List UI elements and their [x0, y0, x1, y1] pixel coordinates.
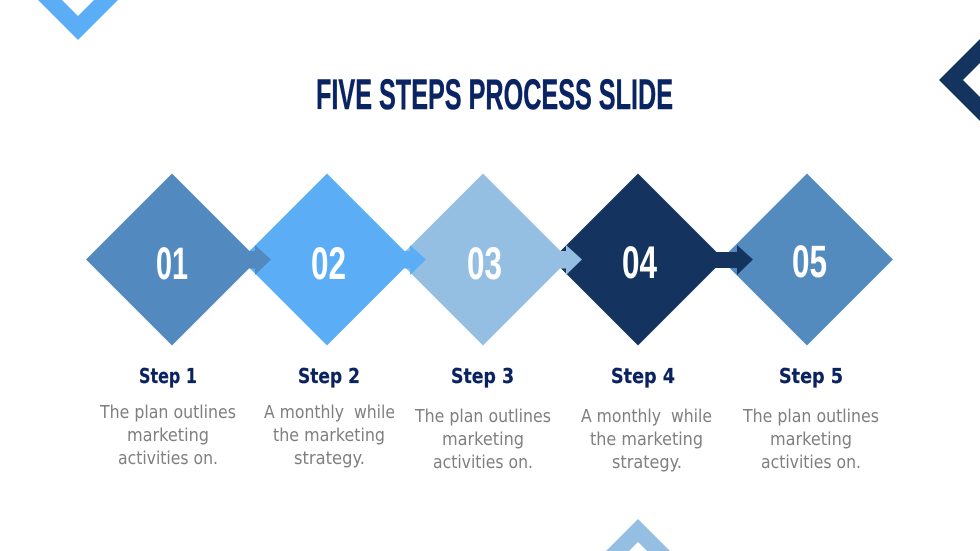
text block: step 3 description: activities on. — [433, 452, 533, 473]
number 01: 01 — [156, 238, 188, 289]
diamond 5 — [721, 174, 893, 346]
text block: step 5 description: marketing — [770, 429, 852, 450]
text block: step 2 description: the marketing — [273, 425, 385, 446]
text block: step 2 description: A monthly while — [264, 402, 395, 423]
diamond 1 — [86, 174, 258, 346]
number 02: 02 — [311, 238, 346, 289]
arrow: step 1 to 2 — [235, 245, 271, 275]
decorative chevron: top — [38, 0, 118, 40]
arrow: step 4 to 5 — [710, 245, 753, 275]
text block: step 2 description — [264, 402, 395, 469]
text block: step 1 description: The plan outlines — [99, 402, 236, 423]
text block: step 1 description — [99, 402, 236, 469]
arrow: step 3 to 4 — [546, 245, 582, 275]
text block: step 2 description: strategy. — [294, 448, 365, 469]
heading: step 5: Step 5 — [779, 364, 843, 388]
diamond 3 — [397, 174, 569, 346]
text block: step 1 description: activities on. — [118, 448, 218, 469]
diamond 2 — [241, 174, 413, 346]
heading: step 2: Step 2 — [298, 364, 360, 388]
text block: step 4 description: strategy. — [612, 452, 682, 473]
heading: step 4: Step 4 — [611, 364, 675, 388]
text block: step 3 description — [414, 406, 551, 473]
text block: step 4 description — [581, 406, 712, 473]
number 04: 04 — [622, 237, 657, 288]
diamond 4 — [552, 174, 724, 346]
text block: step 3 description: The plan outlines — [414, 406, 551, 427]
heading: step 1: Step 1 — [139, 364, 197, 388]
text block: step 5 description — [742, 406, 879, 473]
title: FIVE STEPS PROCESS SLIDE — [316, 72, 673, 119]
text block: step 4 description: the marketing — [590, 429, 703, 450]
text block: step 3 description: marketing — [442, 429, 524, 450]
text block: step 1 description: marketing — [127, 425, 209, 446]
decorative chevron: right — [939, 39, 980, 121]
heading: step 3: Step 3 — [451, 364, 514, 388]
text block: step 4 description: A monthly while — [581, 406, 712, 427]
text block: step 5 description: The plan outlines — [742, 406, 879, 427]
text block: step 5 description: activities on. — [761, 452, 861, 473]
arrow: step 2 to 3 — [391, 245, 426, 275]
number 05: 05 — [792, 236, 827, 287]
decorative chevron: bottom — [606, 519, 670, 551]
number 03: 03 — [467, 238, 502, 289]
